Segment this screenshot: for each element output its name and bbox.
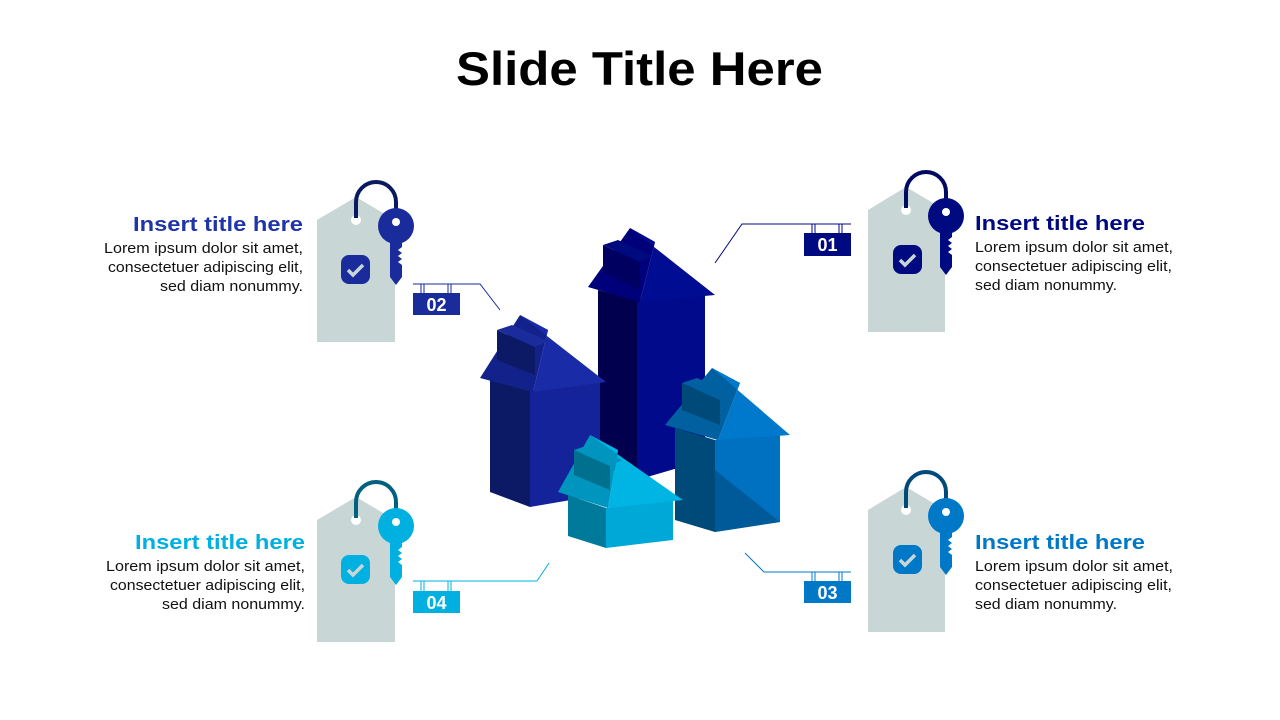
text: 01 [975, 213, 1173, 294]
text: 03: sed diam nonummy. [975, 597, 1117, 613]
text: 02 [104, 214, 303, 295]
house: right mid-blue [665, 368, 790, 532]
text: 01: sed diam nonummy. [975, 278, 1117, 294]
text: 03: consectetuer adipiscing elit, [975, 578, 1172, 594]
tag: 02 top-left [317, 182, 414, 342]
text: 04 [106, 532, 305, 613]
text: 04: Insert title here [135, 532, 305, 554]
badge 03: 03 [817, 583, 838, 603]
text: 02: Insert title here [133, 214, 303, 236]
badge 04 [413, 563, 549, 613]
badge 03 [745, 553, 851, 603]
text: 03 [975, 532, 1173, 613]
text: 01: Insert title here [975, 213, 1145, 235]
badge 02: 02 [426, 295, 447, 315]
text: 01: consectetuer adipiscing elit, [975, 259, 1172, 275]
text: 02: Lorem ipsum dolor sit amet, [104, 241, 303, 257]
text: 04: sed diam nonummy. [162, 597, 305, 613]
badge 04: 04 [426, 593, 447, 613]
title: Slide Title Here [456, 42, 823, 95]
icon: check [893, 545, 922, 574]
text: 03: Lorem ipsum dolor sit amet, [975, 559, 1173, 575]
tag: 03 bottom-right [868, 472, 964, 632]
icon: check [893, 245, 922, 274]
tag: 01 top-right [868, 172, 964, 332]
house: small light blue [558, 435, 683, 548]
icon: check [341, 255, 370, 284]
badge 01 [715, 224, 851, 263]
badge 01: 01 [817, 235, 838, 255]
house: tall navy [588, 228, 715, 480]
text: 02: sed diam nonummy. [160, 279, 303, 295]
icon: check [341, 555, 370, 584]
houses illustration [480, 228, 790, 548]
text: 04: Lorem ipsum dolor sit amet, [106, 559, 305, 575]
badge 02 [413, 284, 500, 315]
text: 04: consectetuer adipiscing elit, [110, 578, 305, 594]
house: left blue [480, 315, 606, 507]
text: 02: consectetuer adipiscing elit, [108, 260, 303, 276]
text: 01: Lorem ipsum dolor sit amet, [975, 240, 1173, 256]
tag: 04 bottom-left [317, 482, 414, 642]
text: 03: Insert title here [975, 532, 1145, 554]
